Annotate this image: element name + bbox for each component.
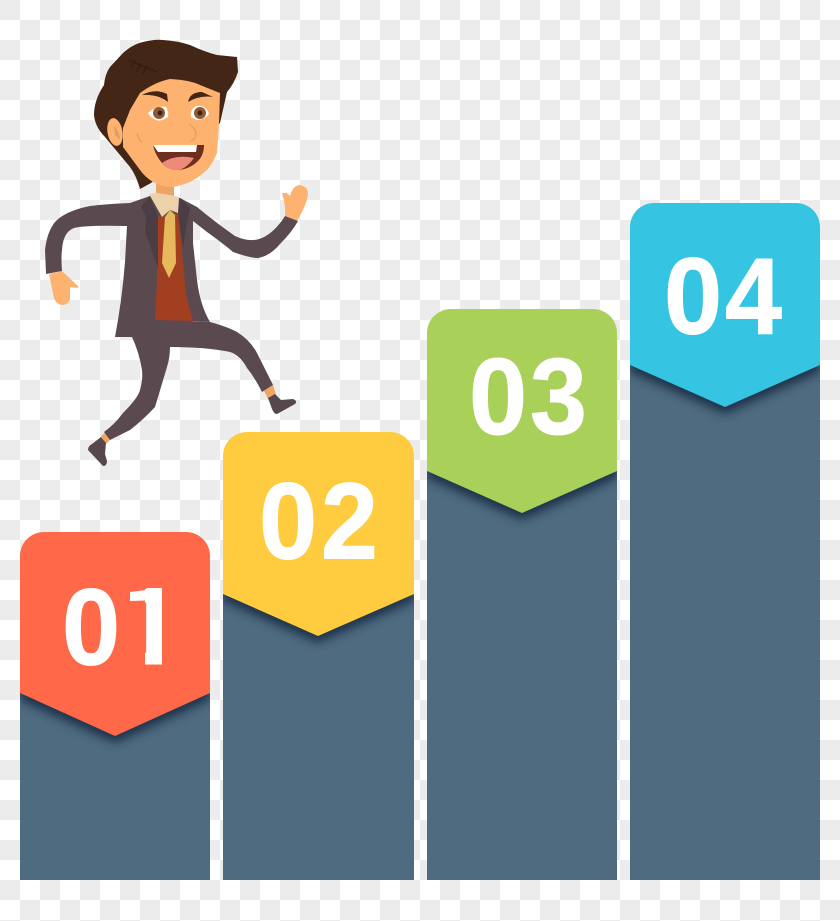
- digit 4: 4: [725, 237, 782, 357]
- digit 0: 0: [62, 567, 120, 688]
- shoe left: [88, 437, 107, 466]
- cheek line: [137, 133, 142, 142]
- ear: [105, 117, 125, 147]
- ear shadow: [114, 126, 120, 140]
- step 01 bar: [20, 640, 210, 880]
- right hand: [282, 185, 308, 221]
- shoe right: [268, 394, 296, 414]
- tongue: [162, 157, 194, 170]
- left pupil: [158, 110, 162, 116]
- step 02 bar: [223, 540, 414, 880]
- teeth: [153, 145, 197, 152]
- digit 3: 3: [530, 337, 587, 458]
- tie: [162, 210, 176, 278]
- step 02 number: [259, 461, 378, 582]
- left eye white: [148, 107, 168, 121]
- lapels: [141, 196, 190, 268]
- step 03 shadow: [427, 471, 617, 524]
- step 04 bar: [630, 310, 820, 880]
- step 03 number: [469, 336, 587, 458]
- step 04: [630, 203, 820, 880]
- right eye white: [191, 106, 209, 120]
- jacket and arms: [45, 196, 298, 337]
- step 04 tag: [630, 203, 820, 407]
- hair: [94, 40, 238, 189]
- step 03 tag: [427, 309, 617, 513]
- step 03 bar: [427, 420, 617, 880]
- nose: [189, 124, 196, 141]
- running businessman: [45, 40, 308, 466]
- right brow: [188, 92, 213, 102]
- step 01: [20, 532, 210, 880]
- face: [123, 79, 220, 187]
- step 04 shadow: [630, 365, 820, 418]
- step 04 number: [664, 236, 782, 357]
- right eye: [191, 106, 209, 120]
- neck: [156, 180, 174, 196]
- left eye: [148, 107, 168, 121]
- digit 0: 0: [259, 461, 317, 582]
- legs: [104, 318, 273, 440]
- collar: [149, 193, 179, 217]
- digit 1 flag: [130, 588, 162, 601]
- digit 2: 2: [321, 462, 378, 582]
- step 02: [223, 432, 414, 880]
- hair strands: [128, 60, 157, 74]
- digit 0: 0: [664, 236, 722, 357]
- mouth: [153, 145, 204, 170]
- left hand: [49, 271, 78, 305]
- digit 0: 0: [469, 336, 527, 457]
- right pupil: [198, 110, 202, 116]
- head: [94, 40, 238, 189]
- step 02 shadow: [223, 594, 414, 648]
- step 03: [427, 309, 617, 880]
- step 01 tag: [20, 532, 210, 736]
- left brow: [142, 91, 168, 102]
- right iris: [194, 107, 206, 119]
- digit 1 stem: 1: [121, 566, 182, 688]
- ankle left: [101, 432, 111, 444]
- step 02 tag: [223, 432, 414, 636]
- vest: [155, 213, 193, 321]
- step 01 shadow: [20, 693, 210, 748]
- ankle right: [264, 385, 276, 399]
- step 01 number: [66, 588, 162, 666]
- left iris: [153, 107, 165, 119]
